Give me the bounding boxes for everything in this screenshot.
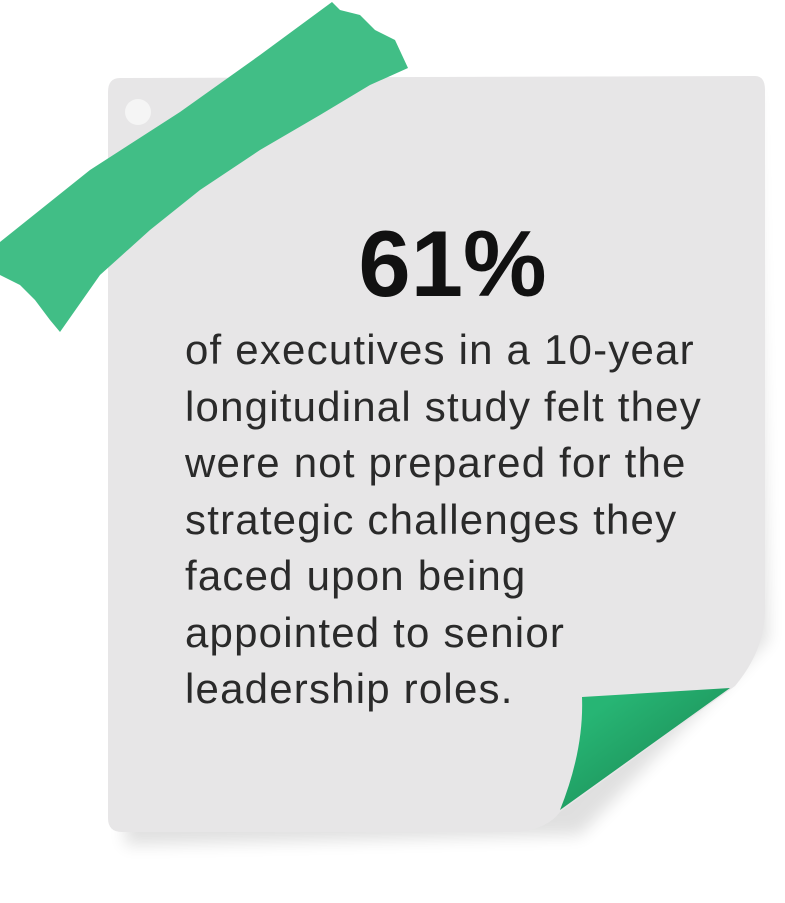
stat number: 61% bbox=[358, 211, 547, 316]
description text: of executives in a 10-year bbox=[185, 326, 695, 373]
curl corner bbox=[560, 688, 730, 810]
description text: leadership roles. bbox=[185, 665, 514, 712]
description text: strategic challenges they bbox=[185, 496, 677, 542]
description text bbox=[185, 326, 702, 712]
tape bbox=[0, 2, 408, 332]
description text: were not prepared for the bbox=[185, 439, 687, 486]
pin hole bbox=[125, 99, 151, 125]
description text: faced upon being bbox=[185, 552, 526, 599]
description text: appointed to senior bbox=[185, 608, 565, 656]
description text: longitudinal study felt they bbox=[185, 382, 702, 430]
